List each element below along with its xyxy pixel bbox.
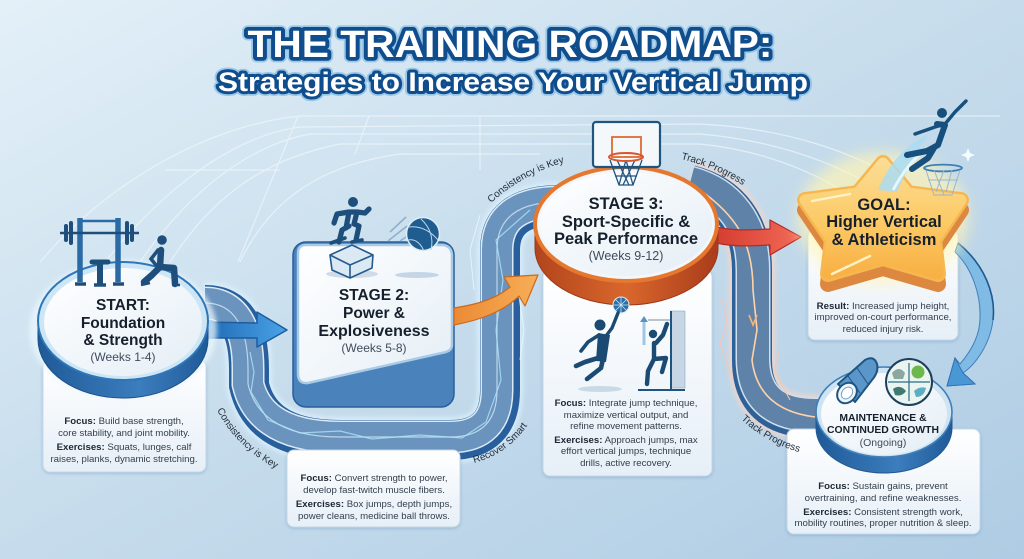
stage 3 disc [535, 167, 718, 305]
goal heading: GOAL: [857, 196, 911, 214]
icon: wall reach [638, 311, 685, 390]
start details text: Focus: [64, 416, 96, 427]
stage 3 heading: STAGE 3: [589, 195, 663, 213]
title [218, 24, 808, 97]
maintenance details text: mobility routines, proper nutrition & sleep. [794, 518, 972, 529]
maintenance heading: (Ongoing) [860, 437, 906, 449]
stage 2 details text: develop fast-twitch muscle fibers. [303, 485, 445, 496]
arrow: start to stage 2 [205, 312, 287, 347]
arrow: stage 2 to stage 3 [454, 275, 538, 325]
panel: goal result [808, 230, 958, 340]
icon: box jump athlete [326, 197, 378, 278]
panel: stage 3 details [543, 270, 712, 476]
stage 3 details text: Integrate jump technique, [586, 398, 697, 409]
label: track progress lower: Track Progress [743, 414, 800, 452]
label: consistency is key upper: Consistency is Key [488, 157, 563, 202]
icon: nutrition plate [886, 359, 932, 405]
stage 3 details text: Exercises: [554, 435, 602, 446]
goal star [797, 152, 969, 284]
stage 3 details text: maximize vertical output, and [564, 410, 688, 421]
panel: maintenance details [787, 429, 980, 534]
icon: basketball [388, 217, 440, 278]
arrow: stage 3 to goal [716, 220, 801, 255]
icon: foam roller [833, 358, 877, 407]
stage 2 heading: Explosiveness [318, 323, 430, 340]
icon: goal athlete and hoop [878, 101, 975, 195]
maintenance heading: CONTINUED GROWTH [827, 425, 939, 436]
road: start to stage 3 [205, 202, 560, 440]
stage 2 card [293, 242, 454, 407]
arrow: goal to maintenance [947, 243, 993, 386]
stage 2 details text: Focus: [300, 473, 332, 484]
maintenance details text: Exercises: [803, 507, 851, 518]
start heading: & Strength [83, 332, 163, 349]
start disc [29, 260, 217, 400]
icon: jumping player [576, 297, 629, 392]
panel: stage 2 details [287, 450, 460, 527]
stage 2 details text: Exercises: [296, 499, 344, 510]
start heading: (Weeks 1-4) [90, 350, 156, 364]
maintenance disc [816, 367, 952, 473]
stage 3 details text: Approach jumps, max [602, 435, 698, 446]
goal result text: Result: [817, 301, 849, 312]
start details text: Squats, lunges, calf [105, 442, 192, 453]
goal result text: improved on-court performance, [815, 312, 951, 323]
stage 2 heading: (Weeks 5-8) [341, 341, 407, 355]
label: consistency is key lower: Consistency is Key [218, 408, 278, 469]
label: track progress upper: Track Progress [682, 152, 745, 184]
card top face [298, 245, 452, 383]
stage 3 heading: Peak Performance [554, 230, 698, 248]
start heading: START: [96, 297, 150, 314]
start details text: Exercises: [57, 442, 105, 453]
maintenance details text: Sustain gains, prevent [850, 481, 948, 492]
stage 3 details text: drills, active recovery. [580, 458, 672, 469]
stage 2 heading: STAGE 2: [339, 287, 409, 304]
stage 2 heading: Power & [343, 305, 405, 322]
maintenance heading: MAINTENANCE & [839, 413, 927, 424]
start details text: raises, planks, dynamic stretching. [50, 454, 198, 465]
subtitle: Strategies to Increase Your Vertical Jump [218, 67, 808, 97]
stage 3 details text: refine movement patterns. [570, 421, 682, 432]
stage 3 details text: Focus: [555, 398, 586, 409]
subtitle: Strategies to Increase Your Vertical Jump [218, 67, 808, 97]
stage 2 details text: Convert strength to power, [332, 473, 448, 484]
stage 3 heading: (Weeks 9-12) [589, 249, 663, 263]
goal result text: Increased jump height, [849, 301, 949, 312]
start details text: Build base strength, [96, 416, 184, 427]
stage 3 details text: effort vertical jumps, technique [561, 446, 691, 457]
panel: start details [43, 360, 206, 472]
maintenance details text: Focus: [818, 481, 850, 492]
title: THE TRAINING ROADMAP: [248, 24, 772, 66]
background track lines [40, 116, 1000, 262]
title: THE TRAINING ROADMAP: [248, 24, 772, 66]
start details text: core stability, and joint mobility. [58, 428, 190, 439]
icon: backboard and hoop [593, 122, 660, 185]
maintenance details text: Consistent strength work, [851, 507, 963, 518]
goal result text: reduced injury risk. [843, 324, 923, 335]
icon: lunge figure [141, 235, 180, 285]
stage 2 details text: power cleans, medicine ball throws. [298, 511, 450, 522]
goal heading: & Athleticism [832, 231, 936, 249]
road: stage 3 to maintenance [690, 183, 830, 418]
stage 2 details text: Box jumps, depth jumps, [344, 499, 452, 510]
icon: squat rack [60, 218, 139, 285]
start heading: Foundation [81, 315, 165, 332]
label: recover smart: Recover Smart [473, 422, 528, 463]
stage 3 heading: Sport-Specific & [562, 213, 690, 231]
maintenance details text: overtraining, and refine weaknesses. [805, 493, 961, 504]
goal heading: Higher Vertical [826, 213, 942, 231]
